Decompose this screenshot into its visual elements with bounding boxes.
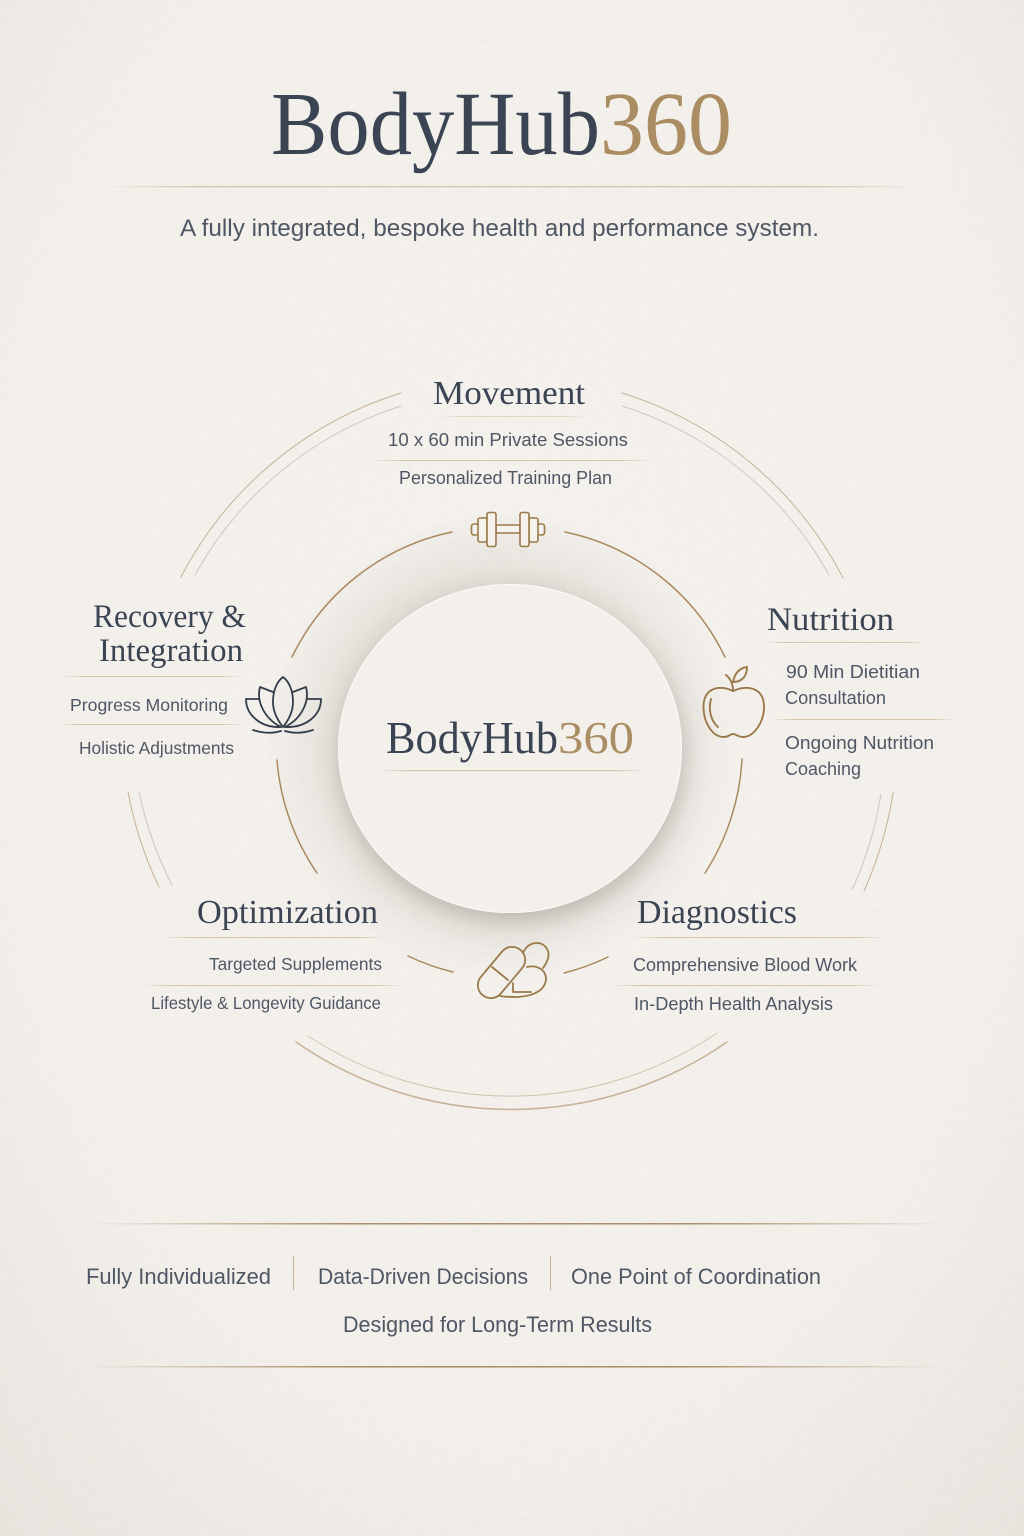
disk wordmark: 360 — [558, 712, 634, 763]
icon: apple — [703, 667, 764, 737]
recovery item 1: Progress Monitoring — [70, 695, 228, 715]
panel: movement — [368, 375, 654, 488]
footer item: data-driven decisions: Data-Driven Decisions — [318, 1264, 528, 1289]
footer item: designed for long-term results: Designed for Long-Term Results — [343, 1312, 652, 1337]
outer ring arcs — [128, 393, 893, 1109]
nutrition item 1: Consultation — [785, 688, 886, 708]
inner ring arcs — [277, 532, 742, 973]
diagnostics item 1: Comprehensive Blood Work — [633, 955, 858, 975]
subtitle: A fully integrated, bespoke health and performance system. — [180, 215, 819, 242]
footer item: fully individualized: Fully Individualized — [86, 1264, 271, 1289]
panel: recovery and integration — [58, 599, 246, 758]
icon: pills — [473, 942, 549, 1003]
panel: diagnostics — [607, 894, 885, 1014]
icon: dumbbell — [472, 512, 544, 546]
icon: lotus — [246, 677, 321, 733]
footer band — [85, 1223, 950, 1368]
recovery heading: Recovery & — [93, 599, 246, 635]
panel: nutrition — [765, 602, 955, 779]
optimization heading: Optimization — [197, 894, 378, 931]
title: BodyHub — [271, 75, 600, 174]
diagnostics heading: Diagnostics — [637, 894, 797, 931]
disk wordmark: BodyHub — [386, 712, 558, 763]
recovery item 2: Holistic Adjustments — [79, 738, 234, 758]
movement item 2: Personalized Training Plan — [399, 468, 612, 488]
optimization item 1: Targeted Supplements — [209, 954, 382, 974]
nutrition item 2: Coaching — [785, 759, 861, 779]
nutrition item 2: Ongoing Nutrition — [785, 733, 934, 753]
movement heading: Movement — [433, 375, 586, 412]
central disk — [269, 514, 741, 986]
nutrition item 1: 90 Min Dietitian — [786, 662, 920, 682]
panel: optimization — [140, 894, 405, 1013]
recovery heading: Integration — [99, 633, 243, 669]
nutrition heading: Nutrition — [767, 602, 894, 638]
title: 360 — [600, 75, 732, 174]
optimization item 2: Lifestyle & Longevity Guidance — [151, 993, 381, 1013]
movement item 1: 10 x 60 min Private Sessions — [388, 430, 628, 450]
diagnostics item 2: In-Depth Health Analysis — [634, 994, 833, 1014]
footer item: one point of coordination: One Point of Coordination — [571, 1264, 821, 1289]
